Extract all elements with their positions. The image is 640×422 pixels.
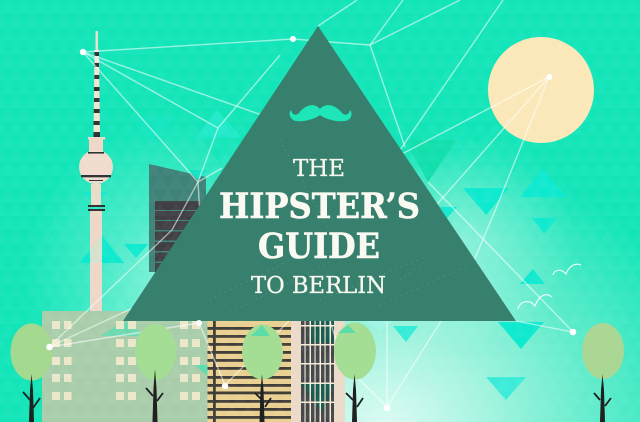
network lines: [49, 0, 573, 407]
birds: [518, 264, 581, 309]
left background glow: [0, 100, 340, 422]
left apartment building: [42, 311, 220, 422]
building behind the pyramid: [149, 164, 207, 272]
tree 2: [135, 324, 176, 422]
tree 5: [582, 323, 624, 422]
TV tower: [79, 31, 113, 311]
title: GUIDE: GUIDE: [258, 227, 380, 267]
network nodes: [46, 36, 576, 411]
striped yellow building: [208, 321, 291, 422]
tree 4: [334, 322, 376, 422]
sun: [488, 37, 594, 143]
title: HIPSTER'S: HIPSTER’S: [219, 187, 420, 227]
speckle texture: [210, 140, 470, 312]
tree 3: [242, 324, 283, 422]
mustache icon: [290, 105, 352, 121]
title: TO BERLIN: TO BERLIN: [251, 271, 386, 299]
grid tower building: [291, 321, 345, 422]
right background glow: [340, 120, 590, 360]
title: THE: THE: [293, 154, 345, 182]
pyramid title panel: [123, 26, 516, 321]
cyan triangles over the tower: [79, 236, 148, 263]
cyan floating triangles: [83, 110, 566, 400]
tree 1: [10, 324, 52, 422]
